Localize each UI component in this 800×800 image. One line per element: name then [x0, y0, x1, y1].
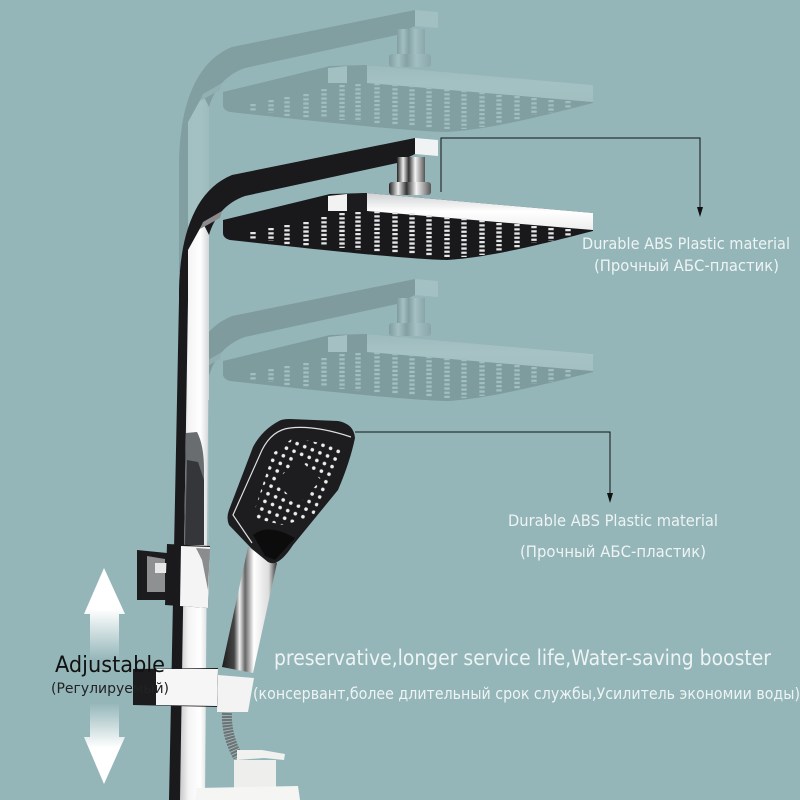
feature caption	[253, 646, 800, 703]
ghost shower head: lowered position	[179, 279, 593, 541]
label: hand shower material: Durable ABS Plastic material	[508, 511, 718, 530]
label: overhead shower material	[582, 234, 790, 275]
leader line to overhead shower	[441, 138, 703, 217]
up arrow	[84, 568, 125, 660]
label: hand shower material: (Прочный АБС-пластик)	[520, 542, 706, 561]
adjustable label: (Регулируемый)	[51, 681, 169, 697]
down arrow	[84, 703, 125, 784]
label: hand shower material	[508, 511, 718, 561]
hand shower head	[228, 419, 355, 563]
soap bottle and shelf	[195, 750, 300, 800]
sliding holder block	[133, 668, 254, 712]
leader line to hand shower	[355, 432, 613, 503]
main overhead shower head	[179, 138, 593, 400]
ghost shower head: raised position	[179, 10, 593, 272]
hand shower handle	[222, 547, 277, 673]
adjustable label: Adjustable	[55, 653, 165, 678]
label: overhead shower material: (Прочный АБС-пластик)	[594, 256, 779, 275]
shower column	[169, 300, 209, 800]
hose	[227, 713, 238, 757]
adjustable label	[51, 653, 169, 697]
upper wall bracket	[137, 544, 210, 608]
